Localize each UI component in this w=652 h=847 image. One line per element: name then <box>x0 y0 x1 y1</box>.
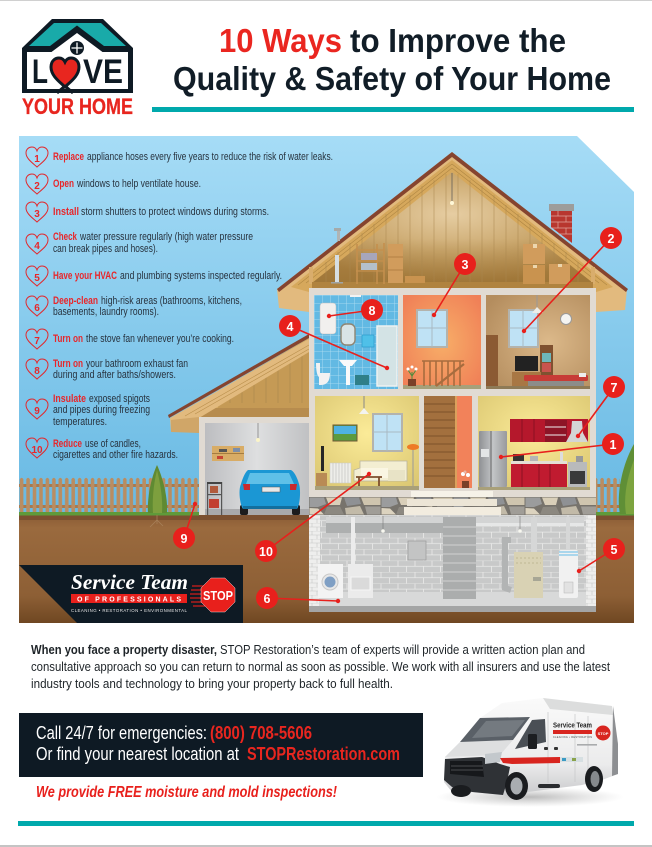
marker 8: 8 <box>369 304 376 318</box>
tip 5: and plumbing systems inspected regularly. <box>120 270 282 282</box>
garage <box>168 334 309 515</box>
tip 2: 2 <box>34 181 40 192</box>
title: to Improve the <box>350 22 566 59</box>
tip 10: Reduce <box>53 438 82 450</box>
tip 8 <box>26 358 188 381</box>
tip 9: exposed spigots <box>89 393 150 405</box>
tip 1 <box>26 147 333 167</box>
marker 2 <box>522 227 622 333</box>
service van: CLEANING • RESTORATION <box>553 736 592 739</box>
tip 2: windows to help ventilate house. <box>76 178 201 190</box>
tip 9: temperatures. <box>53 416 107 428</box>
tip 6: Deep-clean <box>53 295 98 307</box>
marker 6 <box>256 587 340 609</box>
chimney <box>549 204 574 243</box>
logo: Love Your Home: L <box>32 53 48 91</box>
tip 9: and pipes during freezing <box>53 404 150 416</box>
basement <box>309 515 596 612</box>
attic boxes <box>388 244 570 284</box>
marker 3: 3 <box>462 258 469 272</box>
room: bedroom <box>486 295 590 389</box>
tip 3: 3 <box>34 209 40 220</box>
logo: Love Your Home: VE <box>83 53 123 91</box>
tip 10: use of candles, <box>85 438 141 450</box>
contact box: Or find your nearest location at <box>36 744 239 764</box>
tip 1: Replace <box>53 151 84 163</box>
tip 7: the stove fan whenever you’re cooking. <box>86 333 234 345</box>
marker 5 <box>577 538 625 573</box>
trees <box>148 444 634 527</box>
tip 9: 9 <box>34 406 40 417</box>
tip 4: water pressure regularly (high water pressure <box>79 231 253 243</box>
attic shelves <box>356 243 384 284</box>
front steps <box>404 491 501 515</box>
service van: STOP <box>598 731 609 736</box>
car <box>240 470 300 515</box>
roof and attic <box>277 152 628 312</box>
panel: house illustration <box>19 136 634 623</box>
tip 7: Turn on <box>53 333 83 345</box>
ground <box>19 515 634 623</box>
body text: STOP Restoration’s team of experts will provide a written action plan and <box>220 643 585 657</box>
tip 8: 8 <box>34 366 40 377</box>
tip 10: cigarettes and other fire hazards. <box>53 449 178 461</box>
tip 3: Install <box>53 206 79 218</box>
room: kitchen <box>478 396 590 490</box>
body text: When you face a property disaster, <box>31 643 217 657</box>
marker 1: 1 <box>610 438 617 452</box>
tip 5: Have your HVAC <box>53 270 117 282</box>
tip 4: Check <box>53 231 77 243</box>
logo: Love Your Home <box>22 19 133 119</box>
room: middle <box>403 295 481 389</box>
tip 4 <box>26 231 253 255</box>
tip 1: 1 <box>34 154 40 165</box>
contact box <box>19 713 423 777</box>
tip 3: storm shutters to protect windows during storms. <box>81 206 269 218</box>
tip 6: high-risk areas (bathrooms, kitchens, <box>101 295 242 307</box>
tip 6: basements, laundry rooms). <box>53 306 159 318</box>
bottom teal rule <box>18 821 634 826</box>
sky background <box>19 136 634 516</box>
washer and dryer <box>318 564 373 598</box>
tip 10 <box>26 438 178 461</box>
marker 3 <box>432 253 476 317</box>
tip 8: your bathroom exhaust fan <box>86 358 188 370</box>
tip 10: 10 <box>31 445 43 456</box>
attic pipe <box>331 228 343 284</box>
contact box: STOPRestoration.com <box>247 744 400 764</box>
body text <box>31 643 610 691</box>
title: 10 Ways <box>219 22 342 59</box>
panel: Service Team logo: STOP <box>203 588 233 603</box>
title <box>173 22 611 97</box>
marker 7 <box>576 376 625 438</box>
tip 5 <box>26 266 282 286</box>
tip 7: 7 <box>34 336 40 347</box>
foundation stones <box>309 497 596 515</box>
panel: Service Team logo: OF PROFESSIONALS <box>77 596 181 604</box>
tip 9: Insulate <box>53 393 86 405</box>
tip 3 <box>26 202 269 222</box>
tip 6: 6 <box>34 303 40 314</box>
panel: Service Team logo: CLEANING • RESTORATION • ENVIRONMENTAL <box>71 608 188 613</box>
tip 2 <box>26 174 201 194</box>
tip 5: 5 <box>34 273 40 284</box>
service van: Service Team <box>553 720 592 730</box>
marker 9 <box>173 502 197 549</box>
house walls <box>309 288 596 497</box>
tip 4: can break pipes and hoses). <box>53 243 158 255</box>
water heater <box>559 517 578 598</box>
tip 9 <box>26 393 150 428</box>
marker 6: 6 <box>264 592 271 606</box>
tip 8: Turn on <box>53 358 83 370</box>
marker 8 <box>327 299 383 321</box>
room: living room <box>315 396 419 490</box>
staircase <box>424 396 472 488</box>
marker 4: 4 <box>287 320 294 334</box>
fence <box>19 477 634 516</box>
tip 7 <box>26 329 234 349</box>
tip 8: during and after baths/showers. <box>53 369 176 381</box>
panel: Service Team logo: Service Team <box>71 570 188 594</box>
room: bathroom <box>314 295 398 389</box>
tip 4: 4 <box>34 241 40 252</box>
marker 1 <box>499 433 624 459</box>
marker 4 <box>279 315 389 370</box>
body text: industry tools and technology to bring your property back to full health. <box>31 677 393 691</box>
tip 6 <box>26 295 242 318</box>
furnace <box>514 517 543 598</box>
marker 7: 7 <box>611 381 618 395</box>
marker 9: 9 <box>181 532 188 546</box>
title: Quality & Safety of Your Home <box>173 60 611 97</box>
contact box: Call 24/7 for emergencies: <box>36 723 207 743</box>
panel: Service Team logo <box>19 565 243 623</box>
marker 10: 10 <box>259 545 273 559</box>
contact box: (800) 708-5606 <box>210 723 312 743</box>
free inspections callout: We provide FREE moisture and mold inspections! <box>36 784 337 801</box>
marker 5: 5 <box>611 543 618 557</box>
tip 1: appliance hoses every five years to reduce the risk of water leaks. <box>87 151 333 163</box>
tip 2: Open <box>53 178 74 190</box>
marker 10 <box>255 472 371 562</box>
logo: Love Your Home: YOUR HOME <box>22 94 133 119</box>
service van <box>436 698 624 807</box>
marker 2: 2 <box>608 232 615 246</box>
